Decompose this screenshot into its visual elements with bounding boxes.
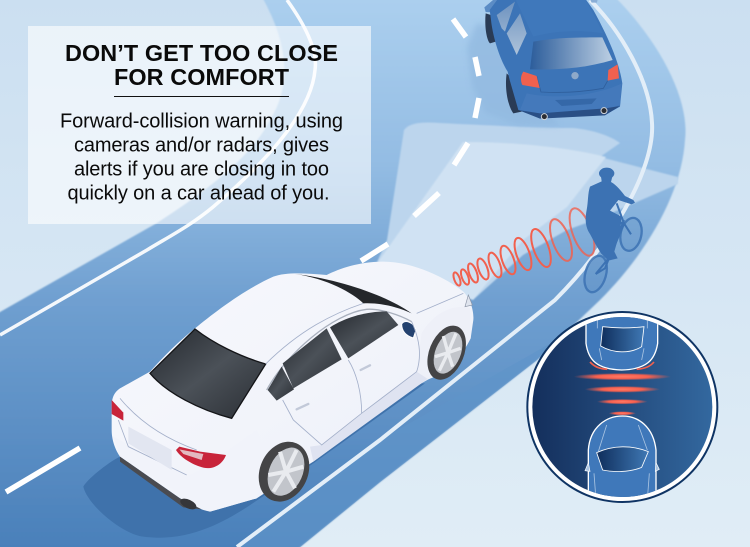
text panel	[28, 26, 371, 224]
right mirror	[590, 0, 598, 3]
rear bumper shading	[113, 430, 267, 512]
bumper	[520, 83, 622, 115]
title: DON’T GET TOO CLOSE	[65, 40, 338, 66]
centre dashes	[6, 19, 479, 492]
lead car brake lights	[590, 362, 654, 369]
inner cone	[378, 142, 606, 300]
rear window	[530, 37, 613, 69]
cyclist	[581, 168, 645, 295]
side windows	[497, 2, 527, 55]
following car windshield	[597, 447, 648, 472]
following car mirrors	[585, 463, 659, 471]
circle frame	[526, 311, 718, 503]
lower bumper	[518, 106, 620, 119]
following car	[588, 416, 656, 507]
body text: cameras and/or radars, gives	[74, 134, 329, 156]
title: FOR COMFORT	[114, 64, 290, 90]
side window chrome	[267, 309, 412, 390]
radar rings	[452, 205, 599, 287]
front side window	[330, 311, 398, 358]
following car details	[594, 425, 649, 500]
circle fill	[532, 317, 712, 497]
mirror	[484, 0, 502, 13]
inset circle: top-down radar view	[526, 310, 718, 507]
body	[112, 262, 473, 512]
lower sill shading	[310, 372, 428, 462]
body text: Forward-collision warning, using	[60, 110, 343, 132]
exhaust	[179, 496, 198, 512]
rear side window	[283, 328, 342, 388]
radar beams	[574, 373, 671, 380]
mirror	[402, 322, 416, 338]
outer cone	[377, 123, 678, 300]
rider	[586, 177, 635, 261]
rear window	[150, 329, 266, 418]
front wheel	[420, 320, 473, 385]
wheels	[485, 13, 522, 113]
sensor cone	[377, 123, 678, 300]
exhausts	[541, 114, 547, 120]
bicycle frame	[596, 203, 631, 274]
front fender shading	[417, 307, 471, 379]
panel background	[28, 26, 371, 224]
lead car windshield	[601, 327, 644, 352]
headlight	[465, 295, 472, 307]
helmet	[599, 168, 614, 179]
blue car ahead	[484, 0, 622, 120]
rear wheel	[249, 434, 319, 510]
windshield	[295, 274, 412, 313]
shadow	[83, 383, 425, 538]
rear wheel	[581, 253, 611, 295]
right tail light	[176, 447, 226, 468]
door handles	[297, 365, 370, 409]
blue car shadow	[467, 23, 560, 126]
body	[490, 0, 622, 118]
roof panel	[515, 0, 603, 37]
lead car details	[597, 317, 647, 360]
body lines	[118, 293, 463, 475]
title rule	[114, 96, 289, 97]
front wheel	[617, 216, 645, 253]
quarter window	[268, 367, 294, 401]
badge	[571, 72, 579, 79]
inset vehicles and beams	[574, 317, 670, 497]
road shoulder band	[237, 338, 560, 547]
white car	[83, 262, 473, 538]
body text: alerts if you are closing in too	[74, 158, 329, 180]
licence plate recess	[128, 427, 172, 470]
tailgate line	[537, 76, 608, 92]
lead car	[586, 310, 658, 370]
right edge line	[237, 0, 652, 547]
body text	[60, 110, 343, 204]
bumper recess	[555, 98, 597, 106]
lower bumper trim	[120, 457, 202, 509]
body text: quickly on a car ahead of you.	[68, 182, 330, 204]
title	[65, 40, 338, 90]
left edge line	[0, 0, 315, 335]
tail lights	[521, 64, 619, 88]
left tail light	[112, 400, 123, 421]
